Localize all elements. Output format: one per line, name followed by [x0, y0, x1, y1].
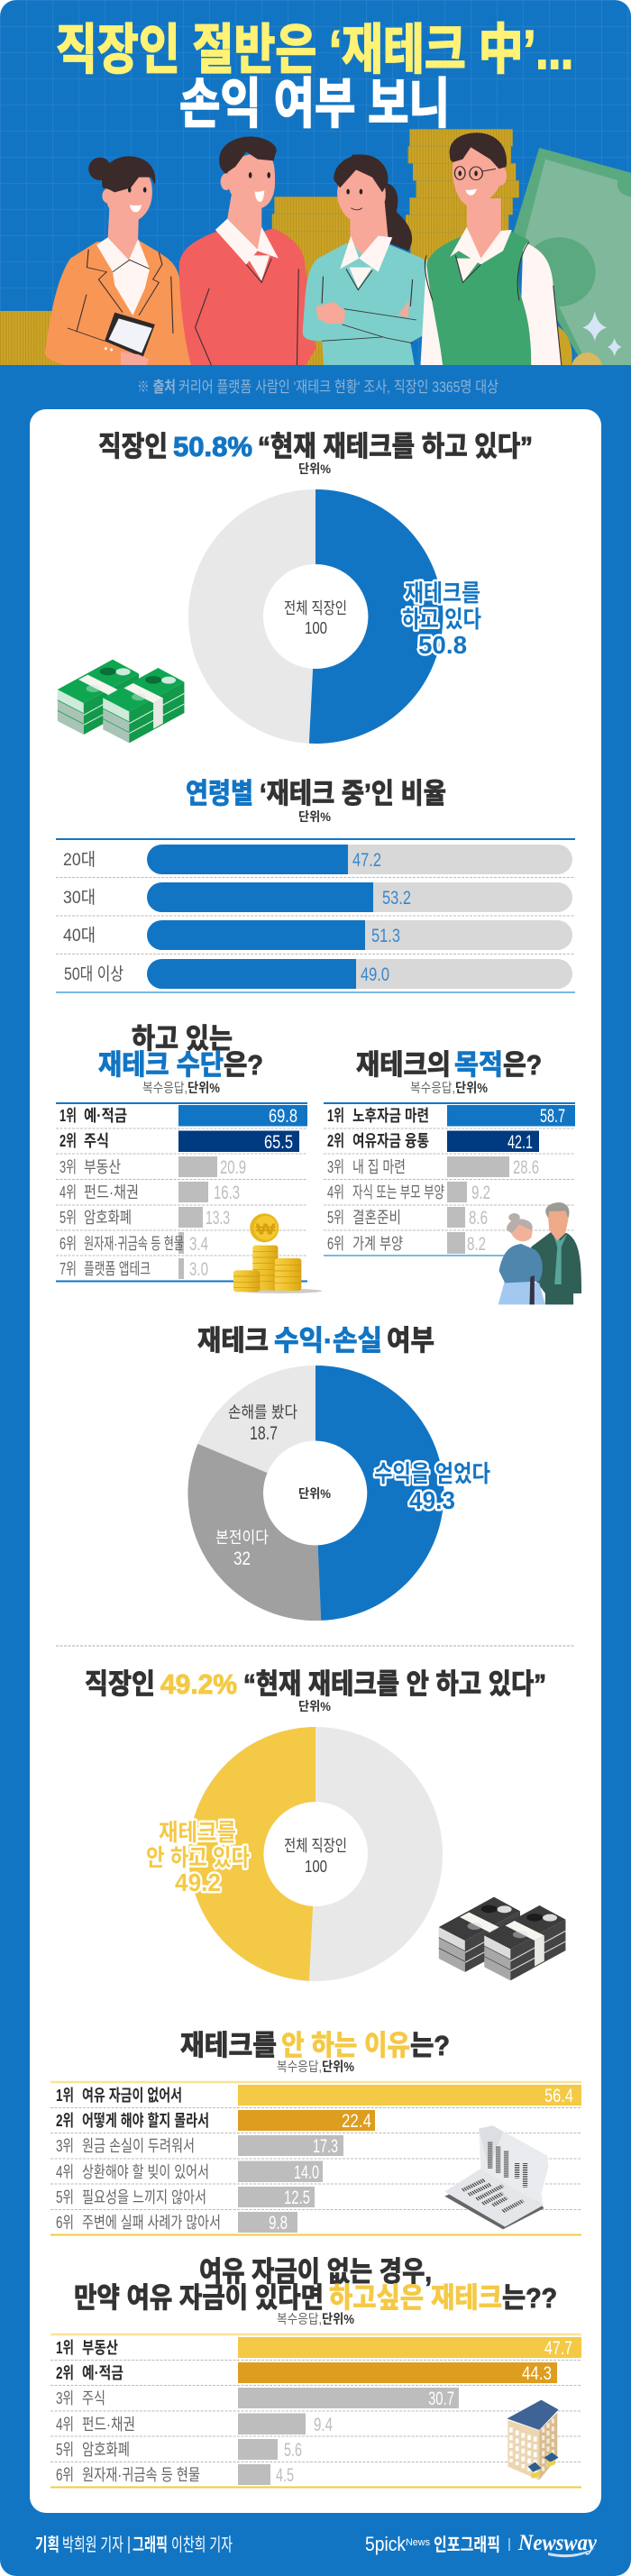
heading: “현재 재테크를 안 하고 있다” [243, 1668, 546, 1700]
coins and banknote backdrop [0, 129, 631, 365]
heading [98, 1023, 263, 1081]
bar table: purpose: 2위 [327, 1132, 344, 1150]
footer [35, 2531, 598, 2557]
unit note: 단위% [298, 1699, 332, 1713]
panel: investing methods [56, 1023, 322, 1293]
icon: elderly couple in hanbok [498, 1202, 581, 1304]
bar table: reasons: 4위 [56, 2163, 74, 2181]
bar table: methods: 펀드·채권 [84, 1183, 139, 1201]
source note: 커리어 플랫폼 사람인 '재테크 현황' 조사, 직장인 3365명 대상 [178, 379, 498, 396]
bar table: preferred investing: 부동산 [82, 2339, 118, 2357]
bar table: methods: 4위 [59, 1183, 77, 1201]
person: woman in teal sweater [303, 154, 434, 365]
donut chart: 단위% [298, 1486, 332, 1501]
heading: 안 하는 이유 [281, 2030, 410, 2061]
bar table: reasons: 필요성을 느끼지 않아서 [82, 2188, 206, 2206]
donut label [402, 580, 481, 659]
donut chart: 100 [305, 619, 327, 637]
icon: gold coins: ₩ [256, 1220, 276, 1238]
panel: preferred investing if funds available [50, 2256, 581, 2488]
bar table: reasons: 어떻게 해야 할지 몰라서 [82, 2112, 209, 2130]
donut chart: 100 [305, 1858, 327, 1876]
bar table: preferred investing: 암호화폐 [82, 2441, 130, 2459]
source note: ※ 출처 [137, 379, 176, 396]
bar table: reasons: 9.8 [269, 2213, 288, 2233]
bar table: preferred investing: 3위 [56, 2389, 74, 2407]
panel: main white card [30, 409, 601, 2513]
heading [356, 1049, 542, 1081]
bar chart: age: 49.0 [361, 964, 389, 985]
donut chart: 32 [233, 1548, 251, 1569]
sub note [277, 2312, 354, 2327]
bar table: reasons: 56.4 [544, 2086, 573, 2106]
bar table: methods: 7위 [59, 1260, 77, 1278]
donut label: 49.3 [409, 1486, 455, 1514]
panel: reasons for not investing [50, 2030, 581, 2235]
bar table: preferred investing: 펀드·채권 [82, 2416, 135, 2434]
sub note [410, 1081, 488, 1096]
heading: ‘재테크 중’인 비율 [260, 778, 446, 809]
donut chart [187, 1366, 444, 1621]
heading: 하고싶은 재테크 [329, 2282, 502, 2314]
footer credits [35, 2535, 233, 2555]
header grid background [0, 0, 631, 365]
icon: sparkles [582, 311, 622, 357]
bar table: purpose: 3위 [327, 1158, 344, 1176]
bar table: methods: 3위 [59, 1158, 77, 1176]
bar table: purpose: 9.2 [471, 1183, 490, 1203]
bar table: preferred investing: 2위 [56, 2364, 74, 2382]
bar table: preferred investing: 47.7 [544, 2338, 572, 2359]
bar table: preferred investing: 주식 [82, 2389, 105, 2407]
person: man in green vest with glasses [420, 132, 562, 365]
unit note: 단위% [298, 809, 332, 824]
heading [180, 2030, 450, 2061]
heading: 목적 [454, 1049, 503, 1081]
heading [186, 778, 446, 809]
bar table: reasons: 6위 [56, 2214, 74, 2232]
footer credits: 이찬희 기자 [171, 2535, 233, 2555]
bar table: methods: 65.5 [264, 1132, 293, 1153]
footer logos: 5pick [365, 2533, 407, 2555]
donut chart [188, 1727, 406, 1981]
heading: 만약 여유 자금이 있다면 [74, 2282, 324, 2314]
bar table: reasons: 3위 [56, 2137, 74, 2155]
bar table: methods: 예·적금 [84, 1107, 127, 1125]
donut label: 하고 있다 [402, 606, 481, 633]
bar chart: age: 53.2 [382, 888, 411, 909]
bar table: purpose: 4위 [327, 1183, 344, 1201]
bar table: methods: 2위 [59, 1132, 77, 1150]
illustration: four office workers with coins and banknote [0, 129, 631, 365]
bar chart: age: 47.2 [352, 850, 381, 871]
bar table: purpose: 5위 [327, 1209, 344, 1227]
bar table: preferred investing: 4.5 [276, 2465, 294, 2486]
bar chart: age [56, 839, 575, 992]
bar table: methods: 부동산 [84, 1158, 121, 1176]
bar table: methods: 13.3 [206, 1208, 230, 1229]
bar table: reasons: 1위 [56, 2087, 74, 2105]
heading [85, 1668, 546, 1700]
bar table: preferred investing [50, 2334, 581, 2488]
bar table: methods: 5위 [59, 1209, 77, 1227]
donut label: 재테크를 [405, 580, 480, 607]
heading: 직장인 [98, 431, 168, 462]
heading [197, 1325, 434, 1357]
heading: 50.8% [173, 431, 252, 462]
title [56, 20, 573, 134]
bar table: purpose: 58.7 [540, 1106, 565, 1127]
bar table: methods: 주식 [84, 1132, 109, 1150]
section divider [56, 1645, 575, 1647]
bar table: preferred investing: 9.4 [314, 2415, 333, 2435]
bar table: purpose [324, 1103, 575, 1256]
bar chart: age: 40대 [63, 926, 96, 945]
donut label: 재테크를 [159, 1819, 236, 1846]
heading: 여유 자금이 없는 경우, [199, 2256, 432, 2288]
bar table: preferred investing: 5.6 [284, 2440, 302, 2461]
bar table: purpose: 8.6 [469, 1208, 488, 1229]
panel: share by age [56, 778, 575, 992]
title: 손익 여부 보니 [179, 74, 450, 134]
bar table: methods [56, 1103, 307, 1282]
icon: green money stacks [58, 660, 184, 743]
sub note: 복수응답, [277, 2060, 322, 2075]
bar table: methods: 6위 [59, 1235, 77, 1253]
icon: gold coins [233, 1213, 322, 1293]
donut chart: 전체 직장인 [284, 1837, 347, 1855]
donut chart: 전체 직장인 [284, 599, 347, 617]
sub note: 복수응답, [142, 1081, 187, 1096]
header panel [0, 0, 631, 365]
footer logos [365, 2531, 598, 2557]
donut label: 안 하고 있다 [146, 1844, 250, 1871]
heading: 는? [410, 2030, 450, 2061]
bar table: purpose: 자식 또는 부모 부양 [352, 1183, 444, 1201]
bar table: purpose: 노후자금 마련 [352, 1107, 429, 1125]
donut chart [225, 489, 443, 744]
footer credits: 그래픽 [133, 2535, 168, 2555]
person: man in red sweater [179, 136, 316, 365]
bar table: preferred investing: 44.3 [522, 2363, 552, 2384]
heading: 여부 [387, 1325, 434, 1357]
bar table: methods: 암호화폐 [84, 1209, 132, 1227]
panel: profit or loss donut [187, 1325, 490, 1621]
donut label [146, 1819, 250, 1896]
bar table: reasons: 여유 자금이 없어서 [82, 2087, 182, 2105]
bar table: methods: 3.4 [189, 1234, 208, 1255]
icon: apartment building [507, 2400, 559, 2480]
sub note: 단위% [187, 1081, 220, 1096]
heading: 는?? [502, 2282, 557, 2314]
heading: 은? [224, 1049, 263, 1081]
sub note [277, 2060, 354, 2075]
bar chart: age: 20대 [63, 850, 96, 870]
sub note [142, 1081, 220, 1096]
bar table: reasons: 원금 손실이 두려워서 [82, 2137, 195, 2155]
bar table: reasons: 17.3 [313, 2136, 338, 2157]
bar table: methods: 16.3 [214, 1183, 240, 1203]
donut chart: 본전이다 [215, 1529, 269, 1547]
heading: 직장인 [85, 1668, 155, 1700]
heading: 은? [503, 1049, 542, 1081]
panel: workers doing investing donut [58, 431, 533, 744]
bar table: purpose: 6위 [327, 1235, 344, 1253]
bar table: purpose: 여유자금 융통 [352, 1132, 429, 1150]
bar table: purpose: 내 집 마련 [352, 1158, 406, 1176]
bar table: reasons: 5위 [56, 2188, 74, 2206]
sub note: 복수응답, [410, 1081, 455, 1096]
donut label: 49.2 [175, 1868, 221, 1896]
heading: 재테크 수단 [98, 1049, 224, 1081]
bar table: preferred investing: 6위 [56, 2466, 74, 2484]
heading [98, 431, 533, 462]
heading: “현재 재테크를 하고 있다” [258, 431, 533, 462]
bar table: preferred investing: 예·적금 [82, 2364, 123, 2382]
bar table: methods: 20.9 [220, 1157, 246, 1178]
bar chart: age: 30대 [63, 888, 96, 908]
bar table: preferred investing: 원자재·귀금속 등 현물 [82, 2466, 200, 2484]
icon: grey money stacks [439, 1897, 565, 1980]
bar table: reasons [50, 2082, 581, 2235]
bar table: purpose: 42.1 [508, 1132, 533, 1153]
footer logos: Newsway [517, 2531, 598, 2555]
bar table: reasons: 상환해야 할 빚이 있어서 [82, 2163, 209, 2181]
person: woman in orange jacket [45, 156, 191, 365]
footer logos: News [406, 2537, 430, 2548]
bar chart: age: 50대 이상 [64, 964, 123, 984]
bar table: methods: 69.8 [269, 1106, 297, 1127]
bar table: purpose: 8.2 [467, 1234, 486, 1255]
bar table: reasons: 22.4 [342, 2111, 371, 2132]
bar table: preferred investing: 4위 [56, 2416, 74, 2434]
sub note: 단위% [322, 2312, 354, 2327]
heading: 수익·손실 [274, 1325, 382, 1357]
bar table: reasons: 2위 [56, 2112, 74, 2130]
heading: 재테크의 [356, 1049, 451, 1081]
donut label: 50.8 [418, 631, 467, 659]
sub note: 복수응답, [277, 2312, 322, 2327]
bar table: purpose: 1위 [327, 1107, 344, 1125]
unit note: 단위% [298, 461, 332, 476]
bar table: purpose: 28.6 [513, 1157, 539, 1178]
bar table: purpose: 가계 부양 [352, 1235, 403, 1253]
bar table: methods: 3.0 [189, 1259, 208, 1280]
bar table: methods: 1위 [59, 1107, 77, 1125]
bar table: methods: 플랫폼 앱테크 [84, 1260, 151, 1278]
heading [74, 2256, 557, 2314]
bar table: reasons: 12.5 [284, 2188, 310, 2208]
donut chart: 손해를 봤다 [228, 1403, 297, 1421]
sub note: 단위% [322, 2060, 354, 2075]
heading: 재테크 [197, 1325, 269, 1357]
footer logos: 인포그래픽 [434, 2535, 500, 2555]
bar table: purpose: 결혼준비 [352, 1209, 401, 1227]
bar table: preferred investing: 5위 [56, 2441, 74, 2459]
heading: 연령별 [186, 778, 253, 809]
footer credits: | [127, 2535, 131, 2554]
donut label: 수익을 얻었다 [374, 1460, 490, 1487]
bar table: reasons: 14.0 [294, 2162, 319, 2183]
sub note: 단위% [455, 1081, 488, 1096]
heading: 하고 있는 [132, 1023, 233, 1055]
panel: investing purpose [324, 1049, 581, 1304]
bar table: reasons: 주변에 실패 사례가 많아서 [82, 2214, 221, 2232]
bar table: preferred investing: 1위 [56, 2339, 74, 2357]
heading: 49.2% [160, 1668, 237, 1700]
footer credits: 기획 [35, 2535, 59, 2555]
bar table: methods: 원자재·귀금속 등 현물 [84, 1235, 184, 1253]
donut label [374, 1460, 490, 1514]
donut chart: 18.7 [250, 1423, 278, 1444]
bar table: preferred investing: 30.7 [428, 2389, 454, 2409]
footer credits: 박희원 기자 [62, 2535, 123, 2555]
heading: 재테크를 [180, 2030, 277, 2061]
icon: open financial ledger [444, 2125, 548, 2229]
bar chart: age: 51.3 [371, 926, 400, 946]
panel: workers not investing donut [85, 1668, 565, 1981]
